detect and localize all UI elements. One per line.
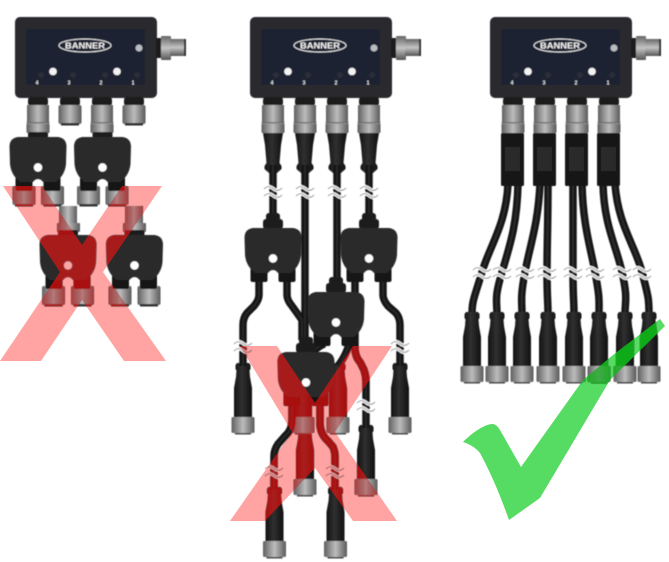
port numbers: 4: [511, 80, 514, 86]
port numbers: 2: [100, 80, 103, 86]
port numbers: 1: [132, 80, 135, 86]
ports: [502, 105, 620, 133]
middle assembly: splitters on cables: [232, 17, 421, 558]
cables: [472, 184, 649, 315]
connectors: [460, 312, 660, 384]
ports and boots: [262, 105, 380, 173]
lower connectors: [232, 363, 412, 558]
logo: Banner: BANNER: [65, 42, 105, 50]
upper Y splitters: [10, 132, 131, 206]
device: middle Banner block: [250, 17, 421, 106]
port numbers: 2: [575, 80, 578, 86]
port numbers: 3: [543, 80, 546, 86]
port numbers: 1: [367, 80, 370, 86]
port numbers: 3: [68, 80, 71, 86]
port numbers: 4: [36, 80, 39, 86]
red X: middle assembly: [230, 346, 397, 521]
port numbers: 1: [607, 80, 610, 86]
left assembly: direct splitters: [10, 17, 186, 306]
port numbers: 3: [303, 80, 306, 86]
port numbers: 2: [335, 80, 338, 86]
splitters: [244, 213, 398, 406]
green check mark: [463, 319, 665, 520]
cable break marks: [234, 187, 409, 477]
device: left Banner block: [15, 17, 186, 106]
breakout housings: [501, 133, 620, 186]
red X: left assembly: [0, 186, 166, 361]
cables: [243, 165, 400, 490]
logo: Banner: BANNER: [540, 42, 580, 50]
logo: Banner: BANNER: [300, 42, 340, 50]
port numbers: 4: [271, 80, 274, 86]
cable break marks: [473, 268, 651, 278]
device: right Banner block: [490, 17, 661, 106]
lower Y splitters: [40, 206, 163, 306]
ports: left block: [26, 105, 146, 133]
right assembly: breakout cables: [460, 17, 661, 384]
